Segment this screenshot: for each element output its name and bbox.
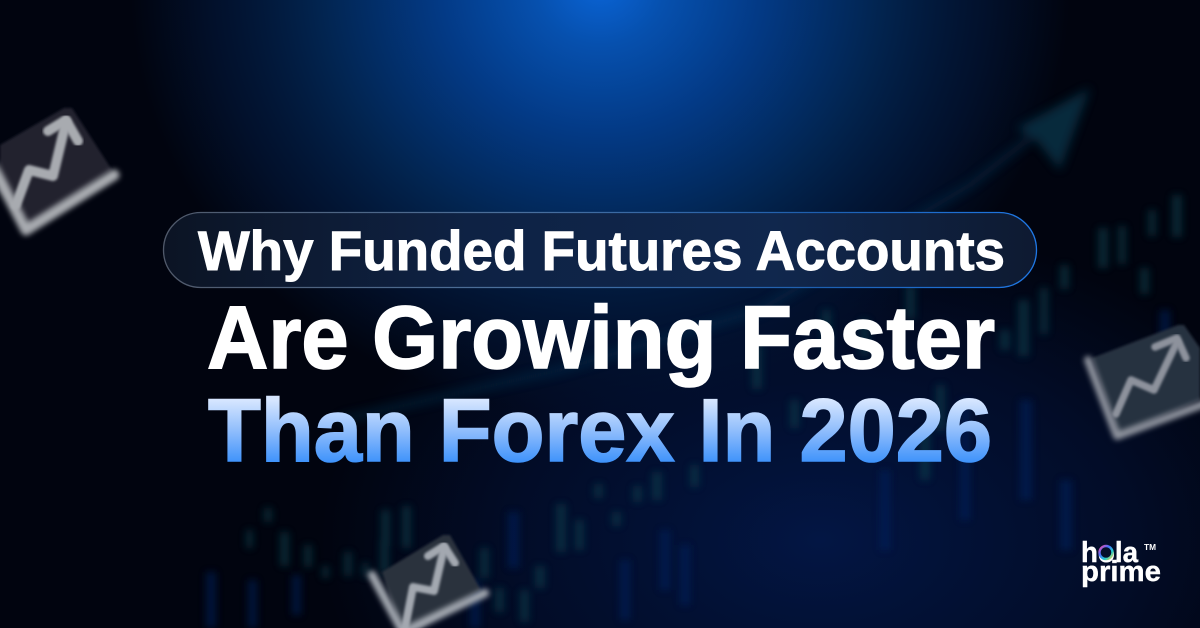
icon: chart card right <box>1088 325 1200 436</box>
background candlestick chart <box>206 195 1182 628</box>
title pill <box>164 212 1036 288</box>
title line 1: Why Funded Futures Accounts <box>198 219 1005 282</box>
title line 3: Than Forex In 2026 <box>208 380 992 480</box>
icon: chart card bottom <box>372 535 485 628</box>
logo: hola prime <box>1081 537 1161 588</box>
title line 2: Are Growing Faster <box>207 287 995 387</box>
logo: hola prime: hola <box>1081 537 1139 569</box>
icon: chart card top left <box>0 108 114 230</box>
logo: hola prime: TM <box>1144 543 1156 552</box>
logo: hola prime: prime <box>1081 556 1161 588</box>
background growth arrow <box>340 88 1090 420</box>
